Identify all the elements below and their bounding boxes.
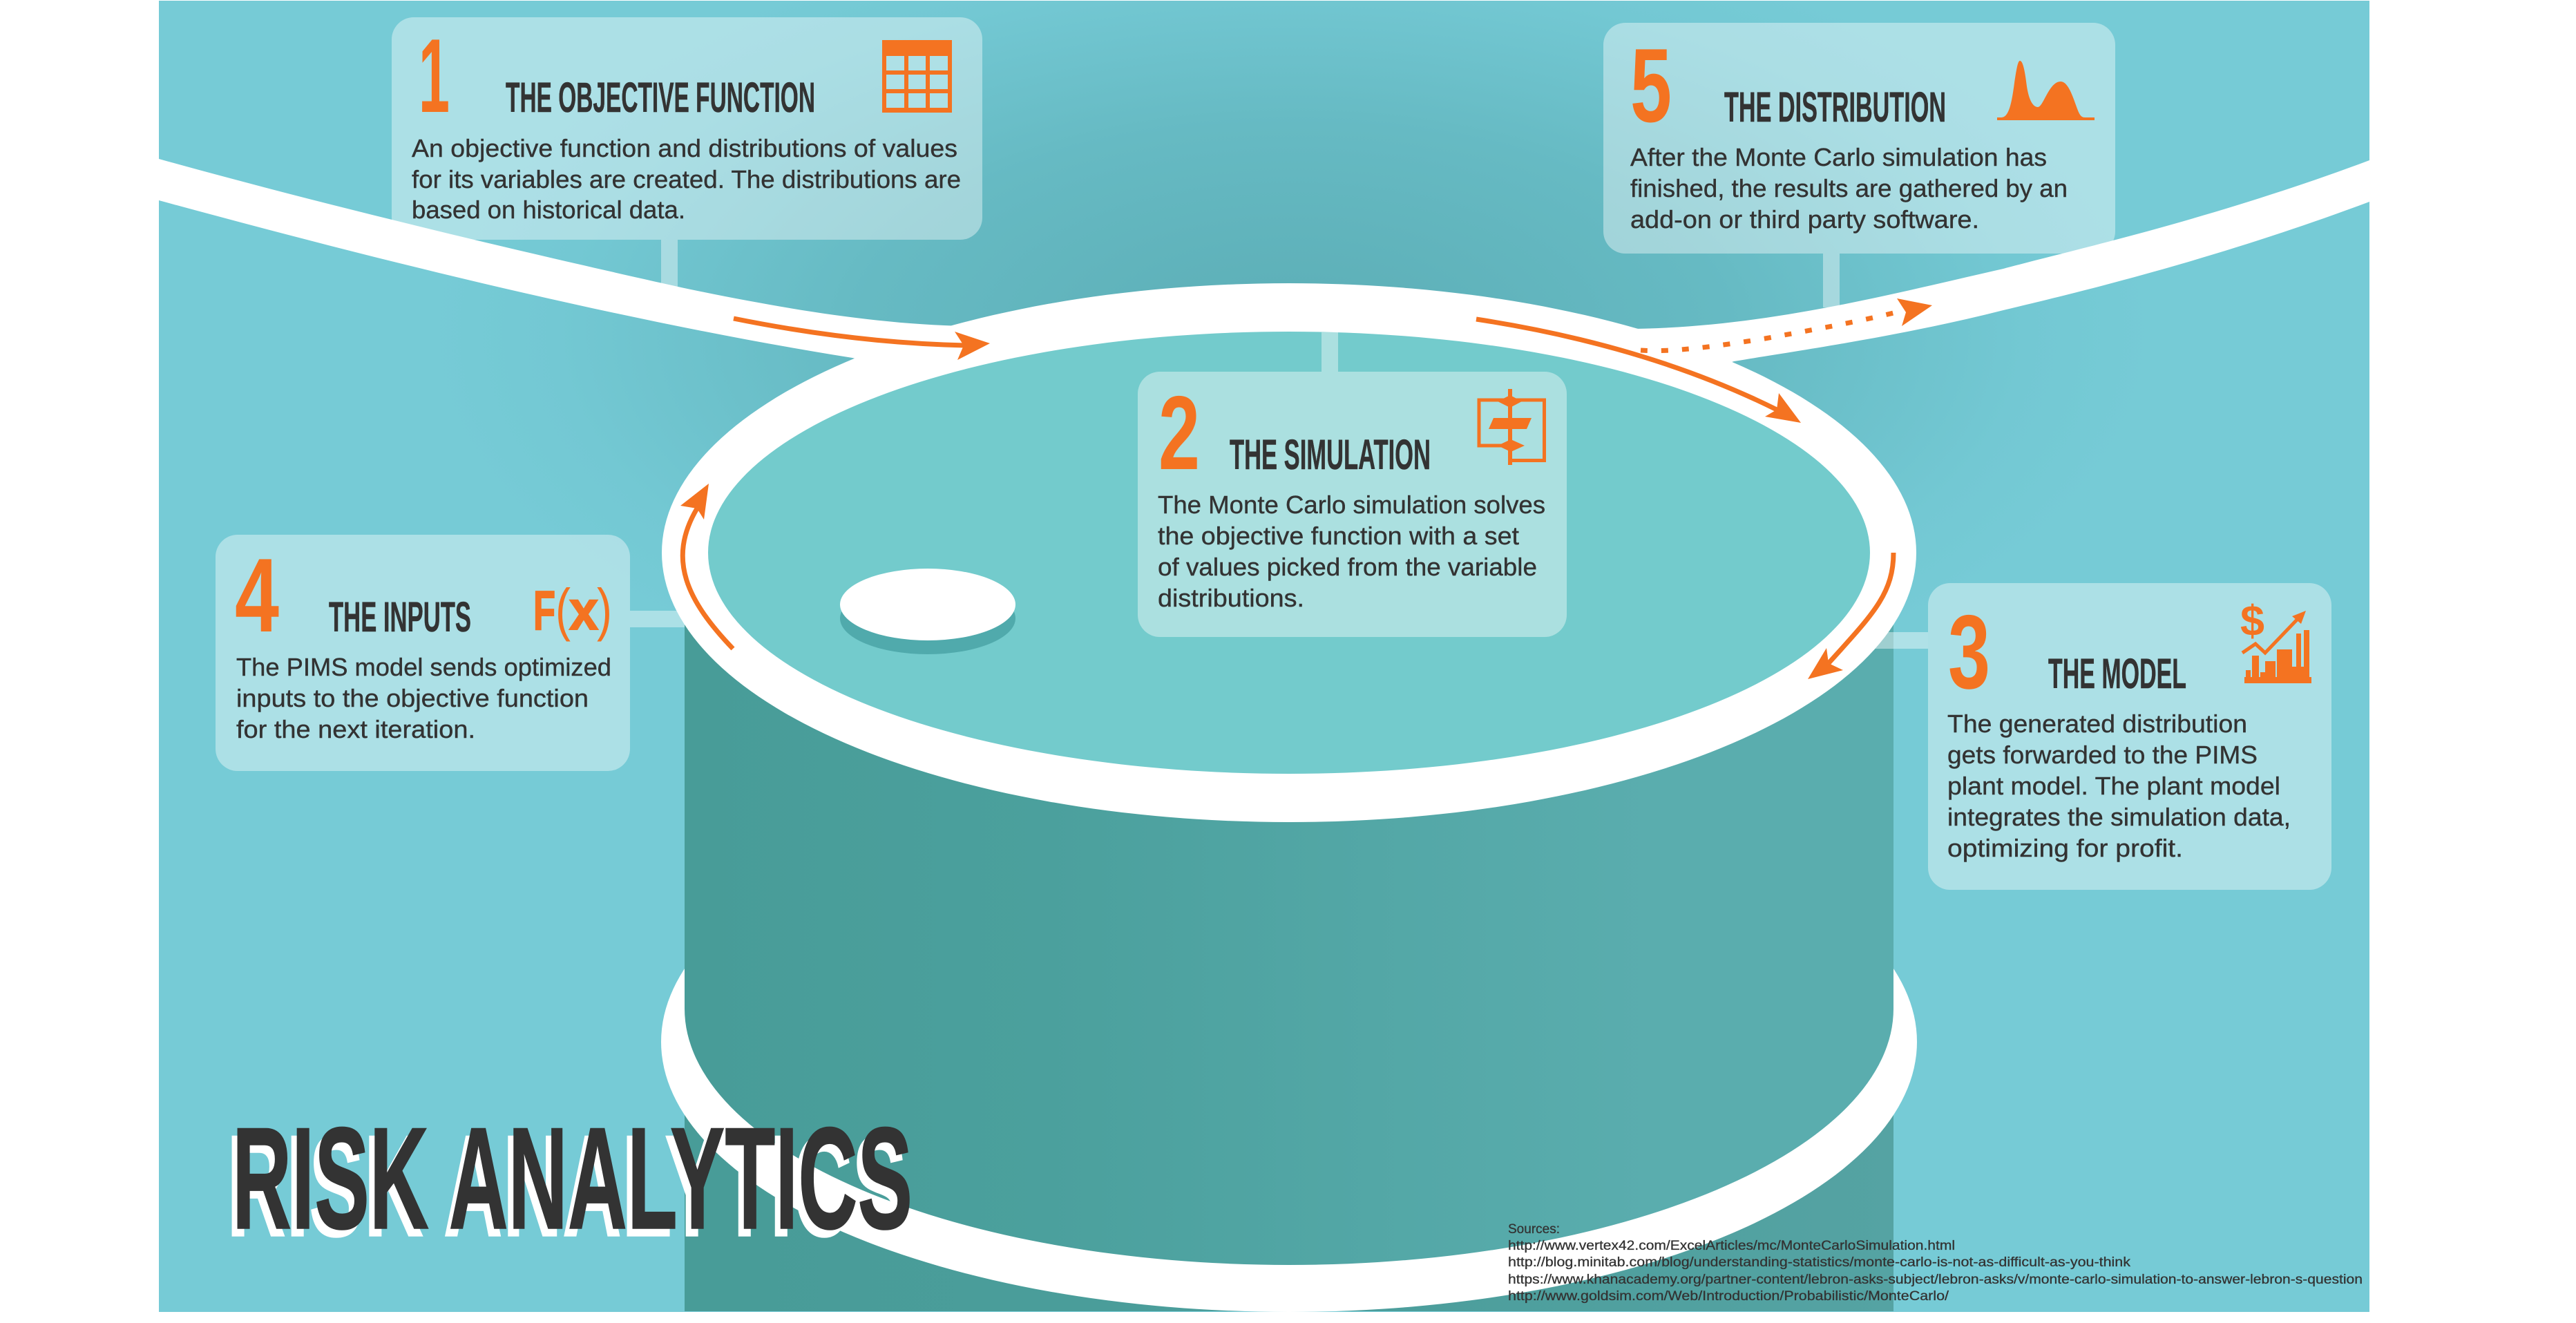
icon: table xyxy=(882,40,952,113)
panel 4: the inputs xyxy=(216,535,692,771)
number 3: 3 xyxy=(1948,593,1990,711)
heading 5: THE DISTRIBUTION xyxy=(1724,84,1946,131)
text 3 xyxy=(1947,710,2291,862)
text 3: plant model. The plant model xyxy=(1947,772,2280,800)
text 1: for its variables are created. The distributions are xyxy=(412,165,961,193)
icon: F(x): ( xyxy=(555,577,571,642)
icon: F(x) xyxy=(533,577,612,642)
text 5: add-on or third party software. xyxy=(1630,205,1979,234)
icon: profit chart: $ xyxy=(2240,598,2264,645)
white road: outgoing right xyxy=(1623,160,2369,387)
icon: F(x): ) xyxy=(597,577,612,642)
icon: distribution curve xyxy=(1997,61,2095,120)
arrow: step 1 to 2 xyxy=(734,318,990,360)
heading 4: THE INPUTS xyxy=(329,593,471,640)
number 4: 4 xyxy=(235,537,279,654)
arrow: step 2 to 3 xyxy=(1476,319,1801,423)
arrow: step 4 to 1 xyxy=(680,484,733,649)
connector: panel 3 to ring xyxy=(1865,632,1928,649)
sources: http://www.vertex42.com/ExcelArticles/mc/MonteCarloSimulation.html xyxy=(1508,1239,1955,1253)
icon: F(x): F xyxy=(533,580,555,641)
text 1: based on historical data. xyxy=(412,196,685,224)
heading 2: THE SIMULATION xyxy=(1230,431,1431,478)
number 1: 1 xyxy=(419,17,450,135)
text 2: The Monte Carlo simulation solves xyxy=(1158,491,1545,519)
text 3: optimizing for profit. xyxy=(1947,834,2183,862)
heading 1: THE OBJECTIVE FUNCTION xyxy=(506,74,815,121)
arrow: dotted to distribution xyxy=(1641,298,1932,351)
sources xyxy=(1508,1222,2363,1304)
text 4: inputs to the objective function xyxy=(236,684,589,712)
lower white ring xyxy=(661,772,1917,1312)
text 4: for the next iteration. xyxy=(236,715,475,743)
title: RISK ANALYTICS xyxy=(227,1105,907,1267)
tank surface xyxy=(708,332,1870,774)
text 2: the objective function with a set xyxy=(1158,522,1519,550)
icon: profit chart xyxy=(2240,598,2311,683)
text 5: finished, the results are gathered by an xyxy=(1630,174,2068,202)
text 2: distributions. xyxy=(1158,584,1304,612)
text 5: After the Monte Carlo simulation has xyxy=(1630,143,2047,171)
sources: Sources: xyxy=(1508,1222,1560,1237)
panel 2: the simulation xyxy=(1138,332,1567,637)
number 2: 2 xyxy=(1158,374,1200,492)
text 3: gets forwarded to the PIMS xyxy=(1947,741,2258,769)
title xyxy=(227,1097,913,1267)
text 2 xyxy=(1158,491,1545,612)
panel 1: the objective function xyxy=(392,17,982,288)
text 5 xyxy=(1630,143,2068,234)
text 3: The generated distribution xyxy=(1947,710,2247,738)
panel 5: the distribution xyxy=(1603,23,2115,307)
disc with shadow xyxy=(840,569,1015,654)
cylinder body xyxy=(685,622,1893,1265)
sources: http://blog.minitab.com/blog/understanding-statistics/monte-carlo-is-not-as-difficult-as-you-think xyxy=(1508,1255,2131,1270)
upper white ring xyxy=(662,283,1916,822)
text 1: An objective function and distributions of values xyxy=(412,134,957,162)
text 4: The PIMS model sends optimized xyxy=(236,653,611,681)
text 2: of values picked from the variable xyxy=(1158,553,1537,581)
sources: http://www.goldsim.com/Web/Introduction/Probabilistic/MonteCarlo/ xyxy=(1508,1289,1949,1304)
sources: https://www.khanacademy.org/partner-content/lebron-asks-subject/lebron-asks/v/monte-carlo-simulation-to-answer-lebron-s-question xyxy=(1508,1273,2363,1287)
heading 3: THE MODEL xyxy=(2048,650,2186,697)
cylinder back wall xyxy=(685,622,1893,1311)
text 1 xyxy=(412,134,961,224)
arrow: step 3 feed xyxy=(1808,553,1893,679)
icon: F(x): x xyxy=(569,580,598,641)
title: RISK ANALYTICS xyxy=(232,1097,913,1259)
white road: incoming left xyxy=(159,159,967,387)
panel 3: the model xyxy=(1928,583,2331,890)
text 3: integrates the simulation data, xyxy=(1947,803,2291,831)
number 5: 5 xyxy=(1630,27,1672,144)
text 4 xyxy=(236,653,611,743)
icon: flowchart xyxy=(1479,389,1545,465)
